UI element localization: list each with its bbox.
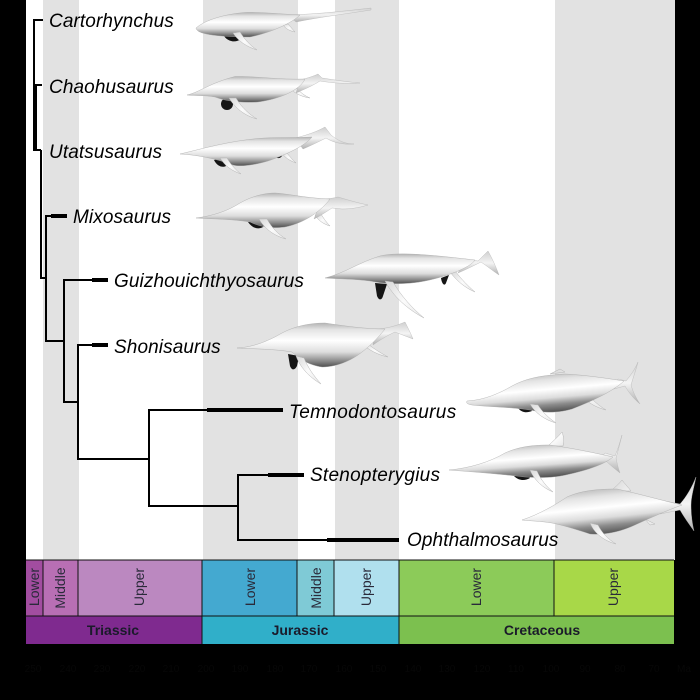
- time axis labels: 230: [94, 664, 111, 675]
- stage: Jurassic Upper: Upper: [358, 568, 374, 606]
- time axis labels: 110: [508, 664, 524, 675]
- period: Jurassic: [202, 616, 399, 644]
- taxon: Shonisaurus: [114, 322, 413, 384]
- period: Cretaceous: Cretaceous: [504, 622, 580, 638]
- time axis labels: 170: [301, 664, 318, 675]
- time axis labels: 210: [163, 664, 180, 675]
- time axis labels: 180: [267, 664, 284, 675]
- time axis labels: 200: [198, 664, 215, 675]
- stage: Jurassic Lower: [202, 560, 297, 616]
- stage: Cretaceous Upper: [554, 560, 674, 616]
- time axis labels: 250: [25, 664, 42, 675]
- time axis labels: [25, 664, 691, 675]
- stage: Cretaceous Lower: Lower: [468, 568, 484, 606]
- time axis labels: 130: [439, 664, 456, 675]
- time axis labels: Ma: [677, 664, 691, 675]
- taxon: Cartorhynchus: [49, 8, 371, 50]
- stage: Jurassic Middle: [297, 560, 334, 616]
- period: Jurassic: Jurassic: [272, 622, 329, 638]
- phylogenetic tree: [34, 20, 399, 540]
- stage: Triassic Lower: Lower: [26, 568, 42, 606]
- period: Cretaceous: [399, 616, 674, 644]
- time axis labels: 90: [579, 664, 591, 675]
- time axis labels: 80: [614, 664, 626, 675]
- taxon: Ophthalmosaurus: Ophthalmosaurus: [407, 530, 559, 551]
- stage: Triassic Lower: [26, 560, 43, 616]
- time axis labels: 240: [60, 664, 77, 675]
- stage: Jurassic Middle: Middle: [308, 567, 324, 609]
- taxon: Utatsusaurus: Utatsusaurus: [49, 142, 163, 163]
- taxon: Stenopterygius: Stenopterygius: [310, 465, 440, 486]
- taxon: Utatsusaurus: [49, 127, 354, 174]
- stage: Jurassic Lower: Lower: [242, 568, 258, 606]
- taxon: Guizhouichthyosaurus: Guizhouichthyosaurus: [114, 271, 304, 292]
- period: Triassic: [26, 616, 202, 644]
- time axis labels: 100: [543, 664, 560, 675]
- taxon: Shonisaurus: Shonisaurus: [114, 337, 221, 358]
- stage: Jurassic Upper: [334, 560, 399, 616]
- stage: Triassic Middle: [43, 560, 78, 616]
- taxon: Chaohusaurus: [49, 74, 360, 119]
- stage: Triassic Middle: Middle: [52, 567, 68, 609]
- geologic timescale: [26, 560, 674, 644]
- time axis labels: 150: [370, 664, 387, 675]
- taxon: Mixosaurus: Mixosaurus: [73, 207, 172, 228]
- period: Triassic: Triassic: [87, 622, 139, 638]
- taxon: Mixosaurus: [73, 193, 368, 239]
- time axis labels: 220: [129, 664, 146, 675]
- taxon: Ophthalmosaurus: [407, 477, 696, 551]
- stage: Cretaceous Lower: [399, 560, 554, 616]
- time axis labels: 160: [336, 664, 353, 675]
- time axis labels: 190: [232, 664, 249, 675]
- taxon: Cartorhynchus: Cartorhynchus: [49, 11, 174, 32]
- time axis labels: 140: [405, 664, 422, 675]
- time axis labels: 70: [648, 664, 660, 675]
- time axis labels: 120: [474, 664, 491, 675]
- chart background panel: [26, 0, 675, 560]
- stage: Triassic Upper: [78, 560, 202, 616]
- taxon: Chaohusaurus: Chaohusaurus: [49, 77, 174, 98]
- time bands: [43, 0, 675, 560]
- taxon: Temnodontosaurus: [289, 362, 640, 423]
- stage: Triassic Upper: Upper: [131, 568, 147, 606]
- taxon: Guizhouichthyosaurus: [114, 251, 499, 318]
- stage: Cretaceous Upper: Upper: [605, 568, 621, 606]
- taxon: Temnodontosaurus: Temnodontosaurus: [289, 402, 457, 423]
- taxon: Stenopterygius: [310, 432, 622, 492]
